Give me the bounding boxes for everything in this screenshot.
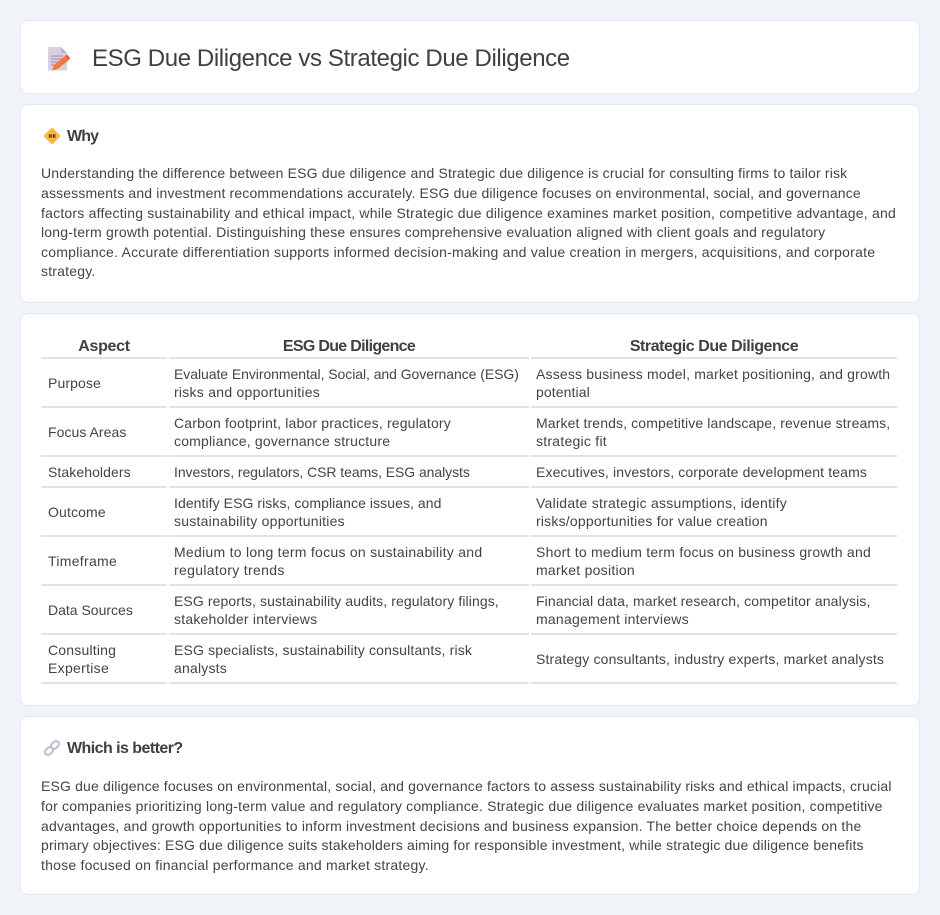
text block: which is better: advantages, and growth opportunities to inform investment decisions and business expansion. The better choice depends on the <box>41 818 861 834</box>
text: Validate strategic assumptions, identify <box>536 494 787 510</box>
text: compliance, governance structure <box>174 432 390 448</box>
text: ESG Due Diligence <box>283 338 415 355</box>
text: Medium to long term focus on sustainability and <box>174 544 482 560</box>
text: ESG reports, sustainability audits, regulatory filings, <box>174 592 499 608</box>
text: Financial data, market research, competitor analysis, <box>536 592 870 608</box>
text: management interviews <box>536 610 689 626</box>
text: Outcome <box>48 504 106 520</box>
panel: comparison table <box>20 313 920 706</box>
text: market position <box>536 562 635 578</box>
text: risks/opportunities for value creation <box>536 512 768 528</box>
text block: which is better: primary objectives: ESG due diligence suits stakeholders aiming for responsible investment, while strategic due diligence benefits <box>41 837 864 853</box>
text: ESG specialists, sustainability consultants, risk <box>174 642 472 658</box>
text: regulatory trends <box>174 562 285 578</box>
heading: which is better: Which is better? <box>67 740 183 757</box>
text: stakeholder interviews <box>174 610 317 626</box>
text block: why: strategy. <box>41 263 95 279</box>
text: Carbon footprint, labor practices, regulatory <box>174 414 451 430</box>
text: Purpose <box>48 374 101 390</box>
text: Market trends, competitive landscape, revenue streams, <box>536 414 890 430</box>
text: Timeframe <box>48 552 117 568</box>
text block: why: Understanding the difference between ESG due diligence and Strategic due diligence is crucial for consulting firms to tailor risk <box>41 165 847 181</box>
text: Aspect <box>78 338 130 355</box>
text: potential <box>536 384 590 400</box>
text: Strategic Due Diligence <box>630 338 798 355</box>
text block: why: long-term growth potential. Distinguishing these ensures comprehensive evaluation aligned with client goals and regulatory <box>41 224 825 240</box>
text: Strategy consultants, industry experts, market analysts <box>536 650 884 666</box>
text block: why: assessments and investment recommendations accurately. ESG due diligence focuses on environmental, social, and governance <box>41 185 861 201</box>
text: strategic fit <box>536 432 607 448</box>
text: Assess business model, market positioning, and growth <box>536 366 890 382</box>
table row: outcome <box>41 494 897 537</box>
heading: why: Why <box>67 128 98 145</box>
text block: which is better: those focused on financial performance and market strategy. <box>41 857 429 873</box>
table row: stakeholders <box>41 464 897 488</box>
text: Evaluate Environmental, Social, and Governance (ESG) <box>174 366 519 382</box>
table row: timeframe <box>41 544 897 586</box>
text: Identify ESG risks, compliance issues, and <box>174 494 442 510</box>
icon: chain link <box>44 740 60 756</box>
table header row <box>41 338 897 359</box>
text: risks and opportunities <box>174 384 320 400</box>
text block: which is better: for companies prioritizing long-term value and regulatory compliance. Strategic due diligence evaluates market position, competitive <box>41 798 883 814</box>
text: analysts <box>174 660 227 676</box>
panel: title header <box>20 20 920 94</box>
title: ESG Due Diligence vs Strategic Due Diligence <box>92 45 570 72</box>
text: Data Sources <box>48 602 133 618</box>
icon: document with pencil <box>48 47 70 70</box>
text block: why: compliance. Accurate differentiation supports informed decision-making and value creation in mergers, acquisitions, and corporate <box>41 244 875 260</box>
text: Investors, regulators, CSR teams, ESG analysts <box>174 464 470 480</box>
text block: why <box>41 165 896 279</box>
text block: why: factors affecting sustainability and ethical impact, while Strategic due diligence examines market position, competitive advantage, and <box>41 205 896 221</box>
table row: consulting expertise <box>41 642 897 684</box>
text block: which is better: ESG due diligence focuses on environmental, social, and governance factors to assess sustainability risks and ethical impacts, crucial <box>41 778 892 794</box>
icon: warning diamond <box>44 128 60 144</box>
table row: focus areas <box>41 414 897 457</box>
panel: which is better <box>20 716 920 895</box>
text: Focus Areas <box>48 424 126 440</box>
panel: why <box>20 104 920 303</box>
text: Stakeholders <box>48 464 131 480</box>
table row: data sources <box>41 592 897 635</box>
text: Short to medium term focus on business growth and <box>536 544 871 560</box>
text: sustainability opportunities <box>174 512 345 528</box>
text: Expertise <box>48 660 109 676</box>
text block: which is better <box>41 778 892 873</box>
text: Executives, investors, corporate development teams <box>536 464 867 480</box>
text: Consulting <box>48 642 116 658</box>
table row: purpose <box>41 366 897 408</box>
